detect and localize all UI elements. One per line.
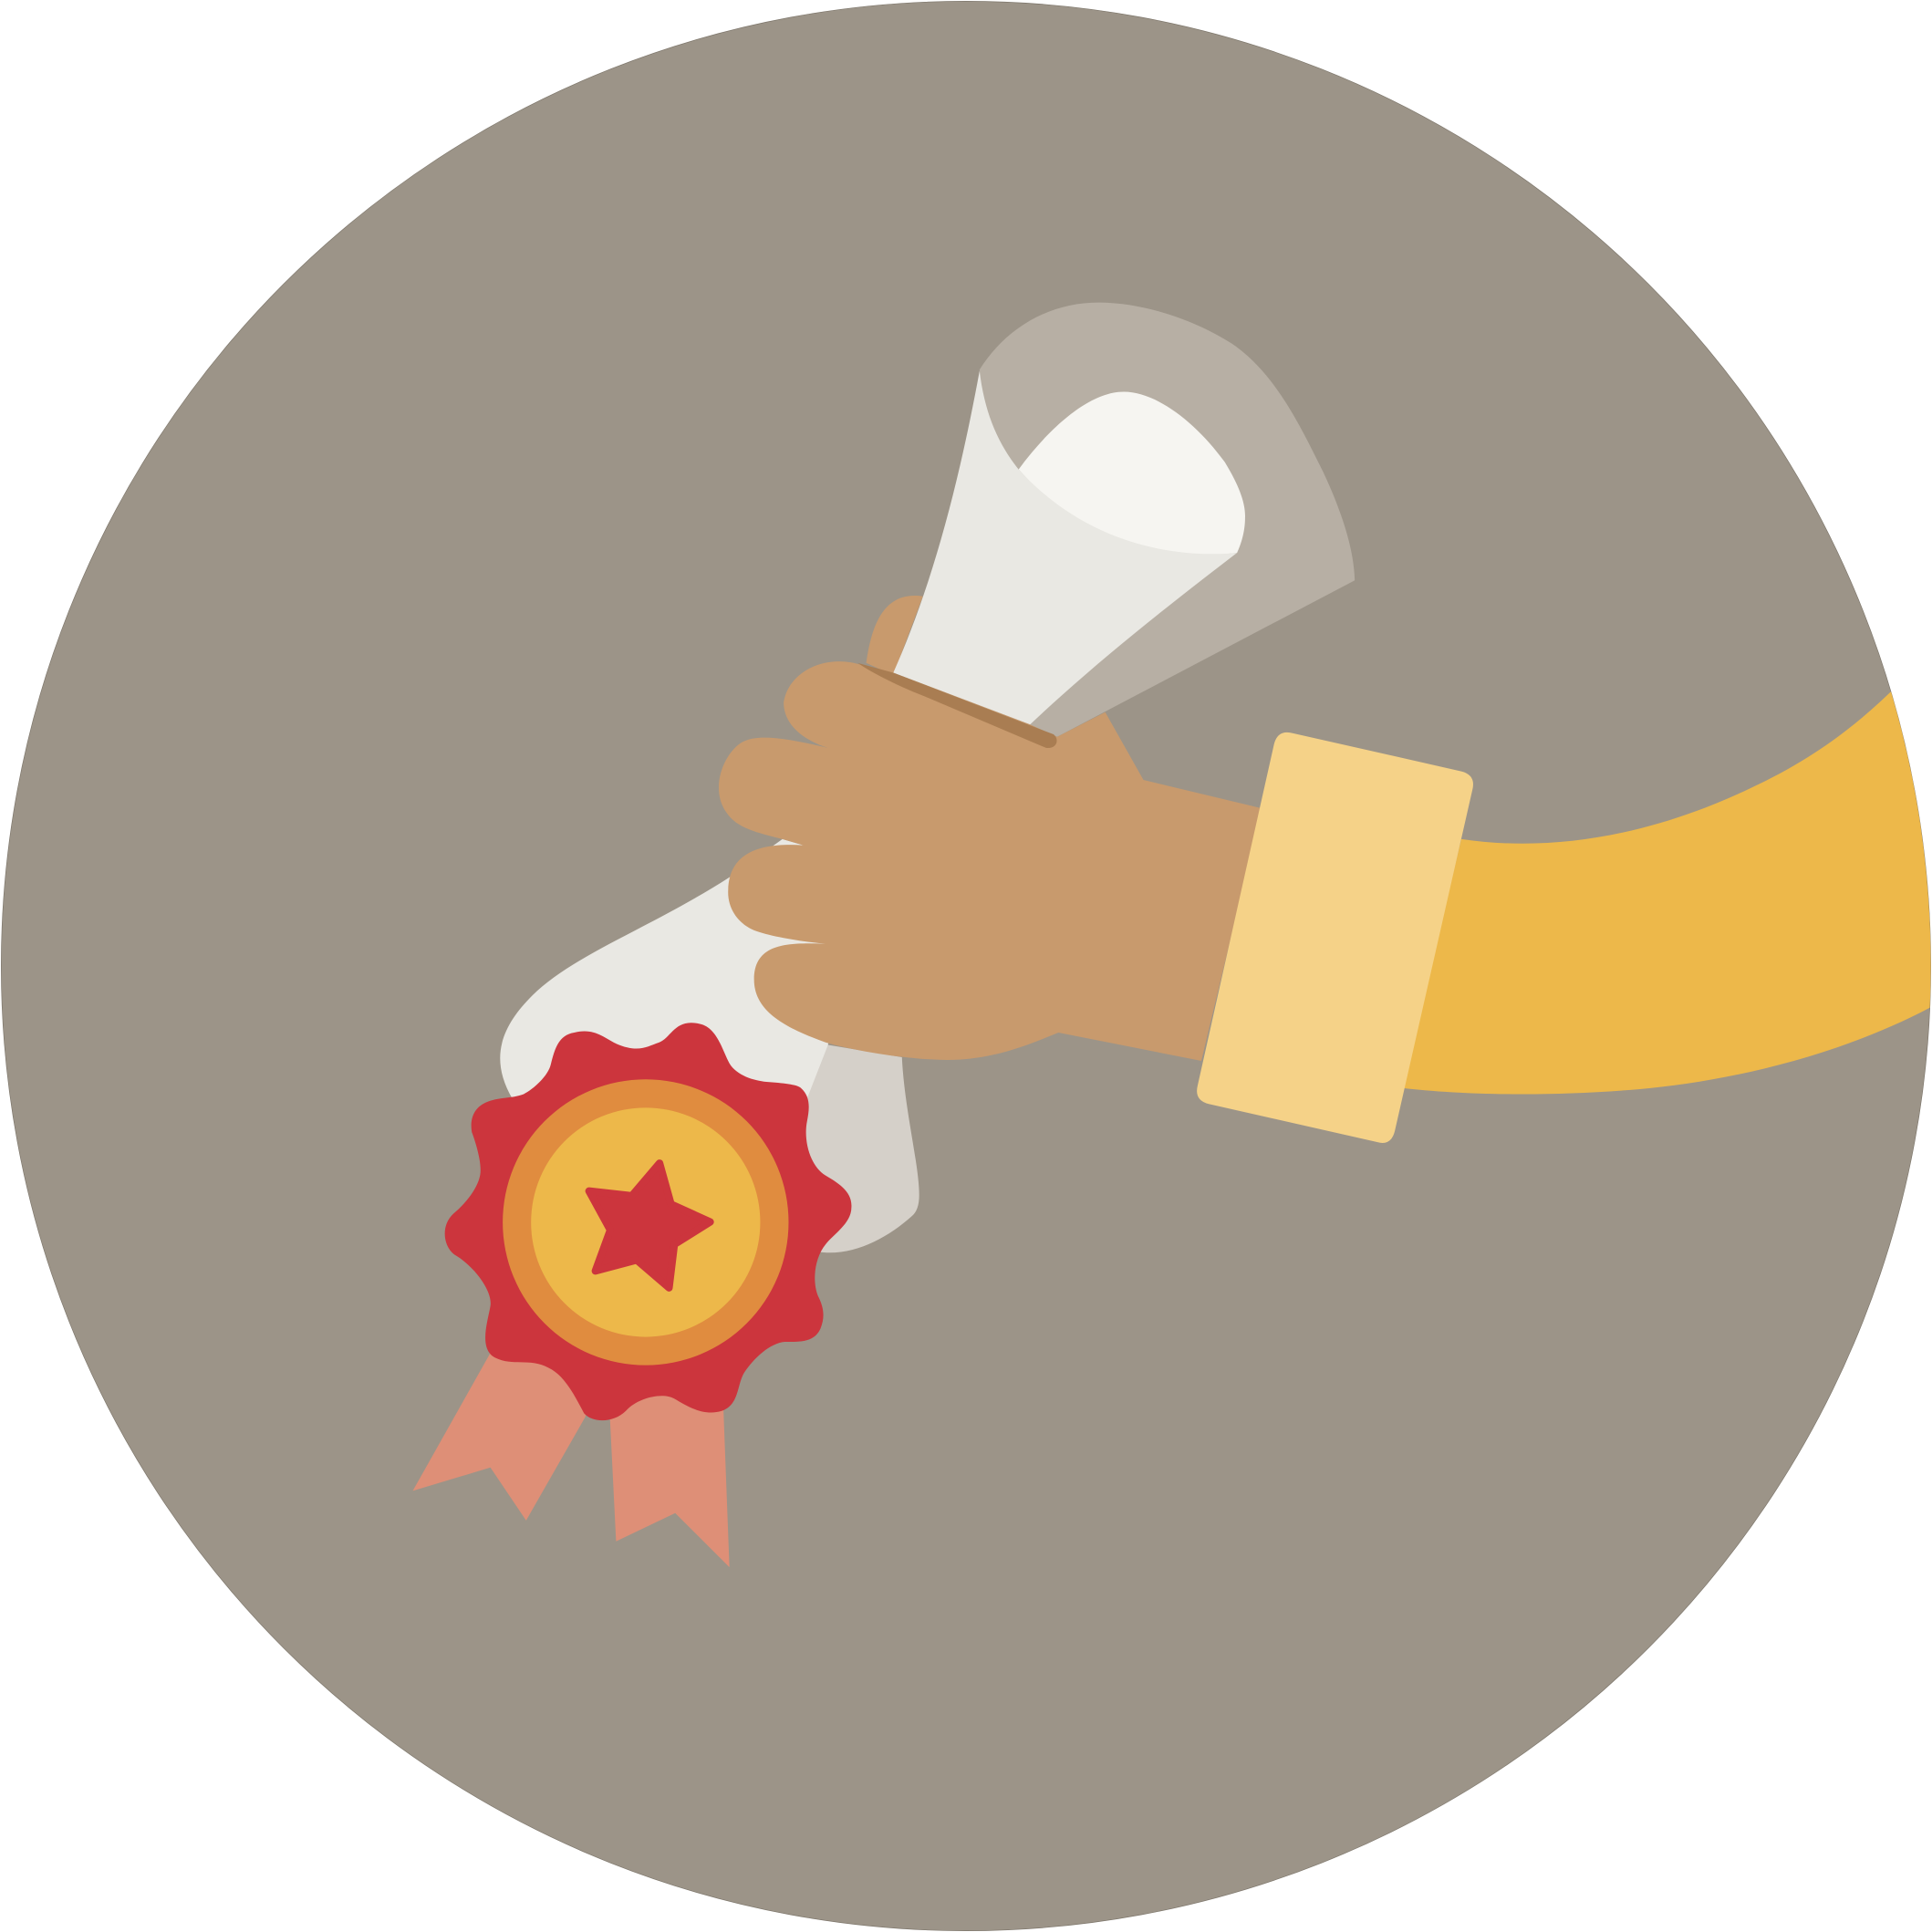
scroll lower front xyxy=(500,839,863,1146)
medal inner disc xyxy=(531,1107,760,1337)
medal outer ring xyxy=(503,1079,788,1366)
left ribbon tail xyxy=(413,1293,616,1521)
scroll upper front xyxy=(893,371,1237,724)
cuff xyxy=(1197,732,1473,1143)
right ribbon tail xyxy=(610,1331,730,1567)
scroll inner highlight xyxy=(1019,392,1245,566)
sleeve xyxy=(1405,691,1931,1095)
scroll upper back xyxy=(980,303,1355,737)
medal xyxy=(413,1023,851,1567)
rosette xyxy=(445,1023,851,1420)
thumb xyxy=(867,596,923,675)
star xyxy=(589,1163,711,1288)
scroll lower shadow side xyxy=(763,1044,919,1252)
scroll binding band xyxy=(857,663,1057,748)
hand xyxy=(719,661,1262,1061)
